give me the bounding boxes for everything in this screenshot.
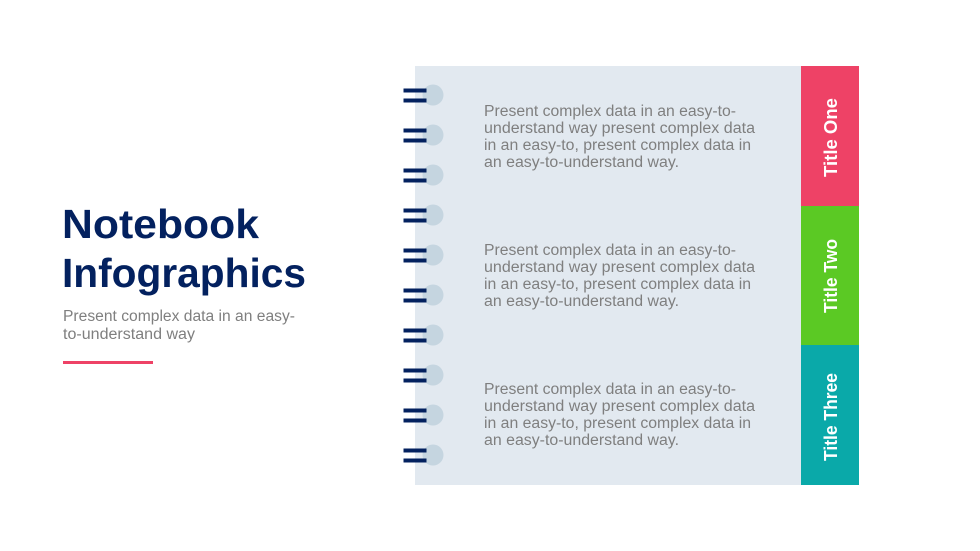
title [62, 201, 306, 296]
title: Notebook [62, 201, 259, 247]
text block 2: understand way present complex data [484, 259, 755, 276]
spiral ring 3 [404, 164, 444, 186]
subtitle [63, 308, 295, 343]
text block 3: understand way present complex data [484, 398, 755, 415]
tab: title one: Title One [821, 98, 841, 177]
spiral ring 1 [404, 84, 444, 106]
text block 2: an easy-to-understand way. [484, 293, 679, 310]
tab: title one [801, 66, 859, 206]
text block 2 [484, 242, 755, 310]
text block 1: in an easy-to, present complex data in [484, 137, 751, 154]
text block 1: Present complex data in an easy-to- [484, 103, 736, 120]
text block 1: understand way present complex data [484, 120, 755, 137]
tab: title two: Title Two [821, 239, 841, 313]
subtitle: to-understand way [63, 326, 195, 343]
spiral ring 8 [404, 364, 444, 386]
text block 1: an easy-to-understand way. [484, 154, 679, 171]
spiral ring 2 [404, 124, 444, 146]
spiral ring 7 [404, 324, 444, 346]
tab: title two [801, 206, 859, 345]
text block 3: Present complex data in an easy-to- [484, 381, 736, 398]
spiral ring 10 [404, 444, 444, 466]
text block 3 [484, 381, 755, 449]
spiral ring 4 [404, 204, 444, 226]
spiral ring 6 [404, 284, 444, 306]
panel: notebook page [415, 66, 802, 485]
tab: title three [801, 345, 859, 485]
accent underline [63, 361, 153, 364]
title: Infographics [62, 250, 306, 296]
tab: title three: Title Three [821, 373, 841, 461]
text block 3: in an easy-to, present complex data in [484, 415, 751, 432]
text block 3: an easy-to-understand way. [484, 432, 679, 449]
spiral ring 9 [404, 404, 444, 426]
subtitle: Present complex data in an easy- [63, 308, 295, 325]
notebook spiral binding [404, 84, 444, 466]
text block 1 [484, 103, 755, 171]
text block 2: in an easy-to, present complex data in [484, 276, 751, 293]
spiral ring 5 [404, 244, 444, 266]
text block 2: Present complex data in an easy-to- [484, 242, 736, 259]
